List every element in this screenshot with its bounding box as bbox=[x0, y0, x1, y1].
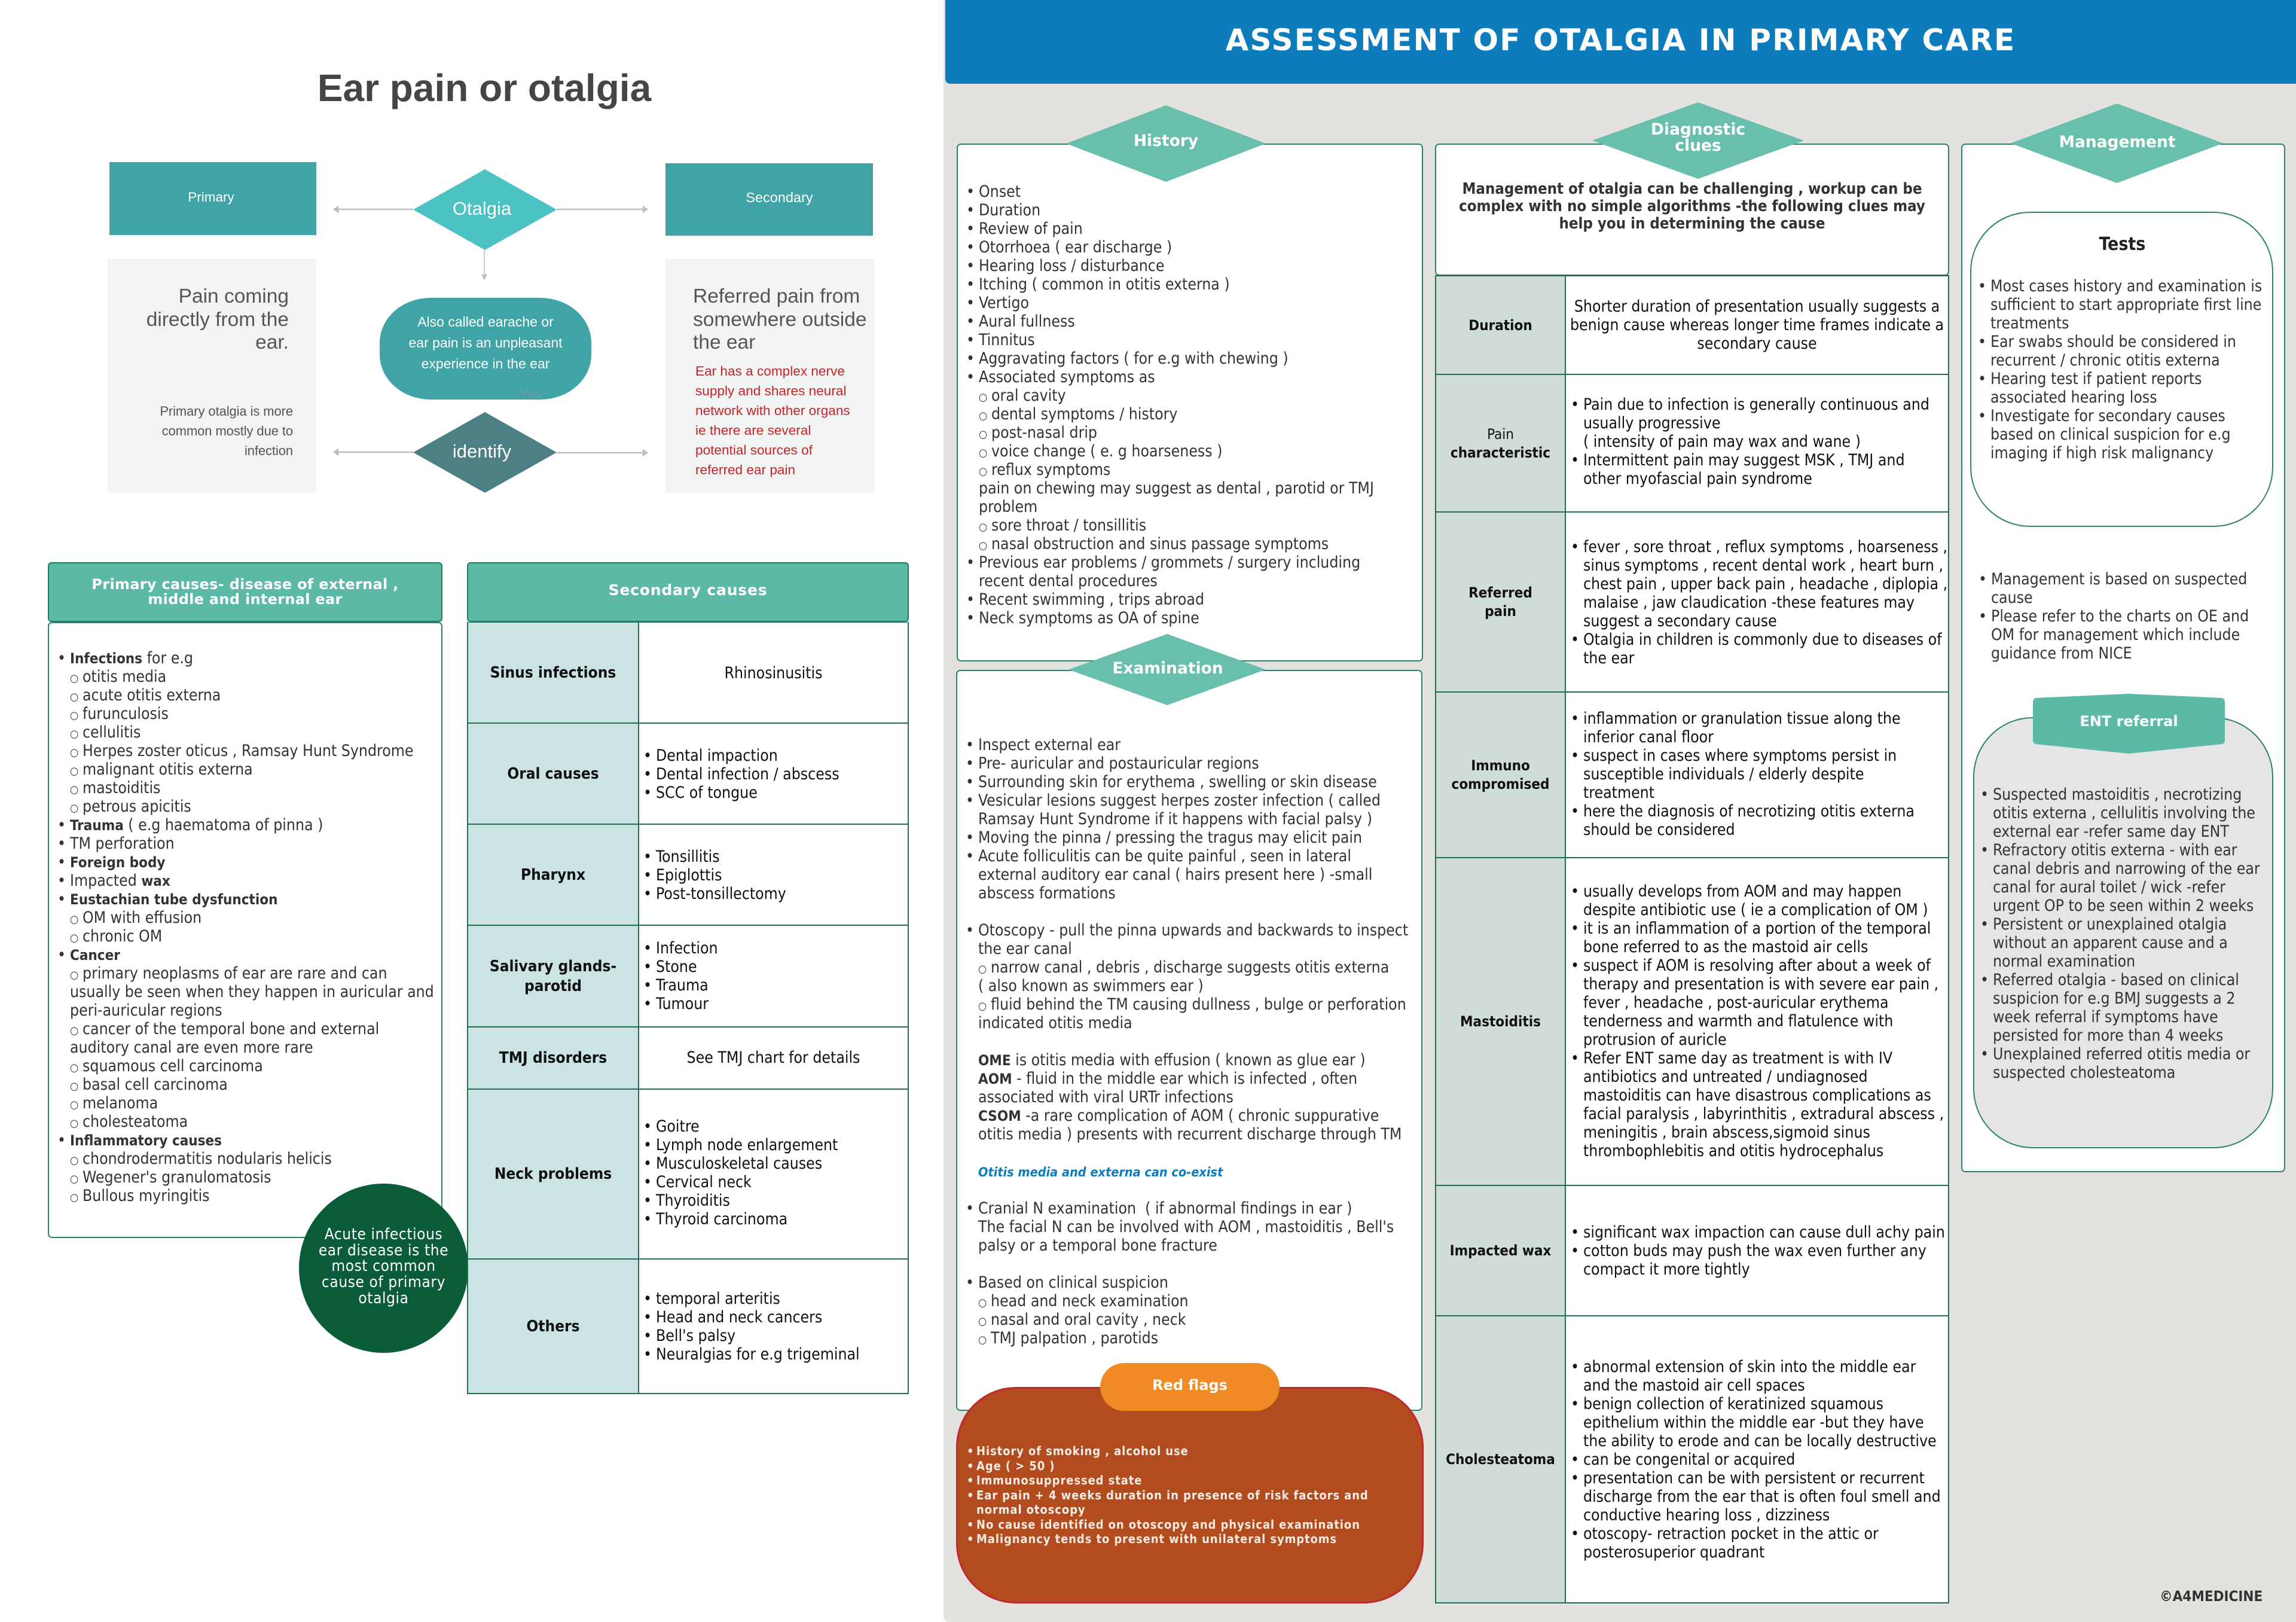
header: secondary causes bbox=[467, 562, 909, 622]
row: Salivary glands-parotid bbox=[468, 926, 908, 1028]
list: primary causes: ○ bbox=[70, 1062, 78, 1074]
row: Pain characteristic: Pain due to infection is generally continuous and usually progressive ( intensity of pain may wax and wane ) Intermittent pain may suggest MSK , TMJ and other myofascial pain syndrome bbox=[1583, 395, 1929, 488]
row: Cholesteatoma bbox=[1436, 1316, 1941, 1602]
text: pain coming directly from the ear: Pain coming directly from the ear. bbox=[146, 285, 289, 353]
panel: diagnostic clues intro bbox=[1435, 144, 1949, 276]
box: Secondary: Secondary bbox=[746, 190, 813, 205]
row: Impacted wax: Impacted wax bbox=[1450, 1242, 1551, 1259]
box: ENT referral bbox=[1973, 717, 2273, 1148]
row: Referred pain: • bbox=[1571, 538, 1579, 556]
box: ENT referral: • bbox=[1980, 785, 1989, 804]
row: Salivary glands-parotid: • bbox=[643, 995, 652, 1013]
list: primary causes: Infections for e.g otitis media acute otitis externa furunculosis cellulitis Herpes zoster oticus , Ramsay Hunt Syndrome malignant otitis externa mastoiditis petrous apicitis Trauma ( e.g haematoma of pinna ) TM perforation Foreign body Impacted wax Eustachian tube dysfunction OM with effusion chronic OM Cancer primary neoplasms of ear are rare and can usually be seen when they happen in auricular and peri-auricular regions cancer of the temporal bone and external auditory canal are even more rare squamous cell carcinoma basal cell carcinoma melanoma cholesteatoma Inflammatory causes chondrodermatitis nodularis helicis Wegener's granulomatosis Bullous myringitis bbox=[70, 649, 434, 1205]
list: primary causes: ○ bbox=[70, 1154, 78, 1167]
row: Pain characteristic bbox=[1436, 375, 1948, 513]
panel: history: • bbox=[966, 294, 975, 312]
list: primary causes: ○ bbox=[70, 691, 78, 703]
row: Immuno compromised: • bbox=[1571, 802, 1579, 821]
heading: Tests: Tests bbox=[2099, 234, 2145, 255]
row: Immuno compromised: • bbox=[1571, 746, 1579, 765]
row: Pain characteristic: Pain characteristic bbox=[1451, 426, 1550, 461]
row: Others: temporal arteritis Head and neck cancers Bell's palsy Neuralgias for e.g trigeminal bbox=[656, 1289, 860, 1364]
row: Impacted wax: • bbox=[1571, 1223, 1579, 1242]
box: tests: • bbox=[1978, 333, 1986, 351]
arrows: flow connectors bbox=[333, 206, 648, 457]
panel: history: • bbox=[966, 257, 975, 275]
row: Neck problems: • bbox=[643, 1154, 652, 1173]
list: red flags: History of smoking , alcohol use Age ( > 50 ) Immunosuppressed state Ear pain + 4 weeks duration in presence of risk factors and normal otoscopy No cause identified on otoscopy and physical examination Malignancy tends to present with unilateral symptoms bbox=[976, 1444, 1369, 1546]
panel: history: • bbox=[966, 553, 975, 572]
list: primary causes: ○ bbox=[70, 802, 78, 815]
row: Salivary glands-parotid: • bbox=[643, 939, 652, 958]
text: primary otalgia is more common: Primary otalgia is more common mostly due to infection bbox=[160, 404, 293, 458]
row: Cholesteatoma: • bbox=[1571, 1469, 1579, 1487]
list: examination: ○ bbox=[978, 1315, 987, 1328]
row: Impacted wax: significant wax impaction can cause dull achy pain cotton buds may push the wax even further any compact it more tightly bbox=[1583, 1223, 1945, 1279]
list: primary causes: ○ bbox=[70, 1191, 78, 1204]
box: Primary: Primary bbox=[188, 190, 234, 205]
panel: red flags: • bbox=[967, 1458, 974, 1472]
panel: primary causes list: • bbox=[57, 816, 66, 834]
panel: examination: • bbox=[966, 754, 974, 773]
pill heading: Red flags: Red flags bbox=[1152, 1377, 1228, 1394]
panel: red flags: • bbox=[967, 1444, 974, 1458]
panel: primary causes list bbox=[48, 622, 442, 1238]
row: Oral causes: • bbox=[643, 765, 652, 783]
box: ENT referral: • bbox=[1980, 1045, 1989, 1063]
panel: red flags: • bbox=[967, 1488, 974, 1502]
panel: examination: • bbox=[966, 773, 974, 791]
panel: primary causes list: • bbox=[57, 649, 66, 667]
list: primary causes: ○ bbox=[70, 765, 78, 778]
row: Neck problems: • bbox=[643, 1191, 652, 1210]
panel: history: • bbox=[966, 590, 975, 609]
row: Pharynx: • bbox=[643, 847, 652, 866]
title: Ear pain or otalgia: Ear pain or otalgia bbox=[317, 66, 651, 109]
row: Cholesteatoma: • bbox=[1571, 1525, 1579, 1543]
box: ENT referral: • bbox=[1980, 841, 1989, 859]
list: primary causes: ○ bbox=[70, 913, 78, 926]
diamond: identify: identify bbox=[453, 441, 511, 462]
list: history: ○ bbox=[979, 428, 987, 441]
diamond heading: History bbox=[1066, 105, 1266, 182]
box: tests: • bbox=[1978, 277, 1986, 295]
list: history: ○ bbox=[979, 410, 987, 422]
box: ENT referral: • bbox=[1980, 915, 1989, 934]
panel: examination: • bbox=[966, 921, 974, 940]
row: Mastoiditis: • bbox=[1571, 882, 1579, 901]
credit: ©A4MEDICINE bbox=[2160, 1588, 2263, 1605]
panel: history: • bbox=[966, 275, 975, 294]
row: Oral causes: • bbox=[643, 783, 652, 802]
row: Others: Others bbox=[526, 1317, 580, 1335]
list: examination: Inspect external ear Pre- auricular and postauricular regions Surrounding skin for erythema , swelling or skin disease Vesicular lesions suggest herpes zoster infection ( called Ramsay Hunt Syndrome if it happens with facial palsy ) Moving the pinna / pressing the tragus may elicit pain Acute folliculitis can be quite painful , seen in lateral external auditory ear canal ( hairs present here ) -small abscess formations Otoscopy - pull the pinna upwards and backwards to inspect the ear canal narrow canal , debris , discharge suggests otitis externa ( also known as swimmers ear ) fluid behind the TM causing dullness , bulge or perforation indicated otitis media OME is otitis media with effusion ( known as glue ear ) AOM - fluid in the middle ear which is infected , often associated with viral URTr infections CSOM -a rare complication of AOM ( chronic suppurative otitis media ) presents with recurrent discharge through TM Otitis media and externa can co-exist Cranial N examination ( if abnormal findings in ear ) The facial N can be involved with AOM , mastoiditis , Bell's palsy or a temporal bone fracture Based on clinical suspicion head and neck examination nasal and oral cavity , neck TMJ palpation , parotids bbox=[978, 736, 1408, 1347]
list: history: ○ bbox=[979, 447, 987, 459]
text: definition lines: Also called earache or ear pain is an unpleasant experience in the ear bbox=[408, 314, 563, 371]
row: Neck problems: • bbox=[643, 1136, 652, 1154]
panel: secondary description bbox=[665, 259, 874, 493]
panel: history: • bbox=[966, 331, 975, 349]
row: Pharynx: • bbox=[643, 885, 652, 903]
row: Cholesteatoma: • bbox=[1571, 1450, 1579, 1469]
panel: history: • bbox=[966, 368, 975, 386]
callout text: Acute infectious ear disease is the most common cause of primary otalgia bbox=[319, 1225, 448, 1307]
heading text: Primary causes- disease of external , middle and internal ear bbox=[91, 576, 399, 608]
row: Mastoiditis: • bbox=[1571, 1049, 1579, 1068]
row: Cholesteatoma: Cholesteatoma bbox=[1446, 1451, 1555, 1468]
row: Immuno compromised: Immuno compromised bbox=[1452, 757, 1549, 792]
list: examination: ○ bbox=[978, 1297, 987, 1309]
label: Examination: Examination bbox=[1112, 659, 1223, 678]
panel: history: • bbox=[966, 609, 975, 627]
text: ear has a complex nerve supply: Ear has a complex nerve supply and shares neural network with other organs ie there are several potential sources of referred ear pain bbox=[695, 364, 850, 477]
list: primary causes: ○ bbox=[70, 728, 78, 740]
panel: red flags: • bbox=[967, 1532, 974, 1546]
text: referred pain from somewhere outside the ear: Referred pain from somewhere outside the ear bbox=[693, 285, 867, 353]
row: Immuno compromised: • bbox=[1571, 709, 1579, 728]
panel: primary causes list: • bbox=[57, 890, 66, 908]
panel: history: • bbox=[966, 349, 975, 368]
panel: primary description bbox=[108, 259, 316, 493]
list: history: ○ bbox=[979, 391, 987, 404]
row: Pain characteristic: • bbox=[1571, 395, 1579, 414]
row: Oral causes: Dental impaction Dental infection / abscess SCC of tongue bbox=[656, 746, 839, 802]
panel: management: • bbox=[1979, 570, 1987, 589]
list: primary causes: ○ bbox=[70, 1117, 78, 1130]
list: primary causes: ○ bbox=[70, 1025, 78, 1037]
row: Mastoiditis bbox=[1436, 858, 1948, 1186]
list: management guidance: Management is based on suspected cause Please refer to the charts on OE and OM for management which include guidance from NICE bbox=[1991, 570, 2249, 663]
panel: red flags: • bbox=[967, 1473, 974, 1487]
row: Neck problems: • bbox=[643, 1173, 652, 1191]
diamond heading: Examination bbox=[1068, 634, 1266, 705]
panel: examination: • bbox=[966, 736, 974, 754]
row: Referred pain: • bbox=[1571, 630, 1579, 649]
label: History: History bbox=[1134, 132, 1198, 150]
list: history: ○ bbox=[979, 465, 987, 478]
header: primary causes bbox=[48, 562, 442, 622]
row: Others: • bbox=[643, 1308, 652, 1327]
list: primary causes: ○ bbox=[70, 672, 78, 685]
row: Pharynx: Tonsillitis Epiglottis Post-tonsillectomy bbox=[656, 847, 786, 903]
box: tests: • bbox=[1978, 407, 1986, 425]
row: Oral causes: Oral causes bbox=[507, 764, 599, 782]
panel: red flags: • bbox=[967, 1517, 974, 1531]
row: Duration bbox=[1436, 276, 1948, 375]
panel: history bbox=[957, 144, 1423, 661]
row: Impacted wax: • bbox=[1571, 1242, 1579, 1260]
row: Cholesteatoma: • bbox=[1571, 1358, 1579, 1376]
panel: primary causes list: • bbox=[57, 871, 66, 890]
list: history: ○ bbox=[979, 521, 987, 533]
list: primary causes: ○ bbox=[70, 1099, 78, 1111]
text: management of otalgia can be challenging: Management of otalgia can be challenging , workup can be complex with no simple algorithms -the following clues may help you in determining the cause bbox=[1459, 180, 1925, 233]
row: Oral causes: • bbox=[643, 746, 652, 765]
row: Mastoiditis: • bbox=[1571, 956, 1579, 975]
label: Management: Management bbox=[2059, 133, 2176, 151]
row: Salivary glands-parotid: Salivary glands- parotid bbox=[490, 957, 616, 995]
list: primary causes: ○ bbox=[70, 1080, 78, 1093]
panel: examination: • bbox=[966, 791, 974, 810]
list: history: ○ bbox=[979, 539, 987, 552]
panel: management bbox=[1961, 144, 2285, 1172]
row: Pharynx: • bbox=[643, 866, 652, 885]
box: Secondary bbox=[665, 163, 873, 236]
row: Salivary glands-parotid: • bbox=[643, 976, 652, 995]
row: Neck problems: • bbox=[643, 1210, 652, 1228]
row: Oral causes bbox=[468, 724, 908, 825]
row: Referred pain: Referred pain bbox=[1468, 584, 1532, 620]
list: primary causes: ○ bbox=[70, 746, 78, 759]
row: Others: • bbox=[643, 1289, 652, 1308]
banner: ENT referral bbox=[2033, 694, 2225, 754]
row: Referred pain: fever , sore throat , reflux symptoms , hoarseness , sinus symptoms , recent dental work , heart burn , chest pain , upper back pain , headache , diplopia , malaise , jaw claudication -these features may suggest a secondary cause Otalgia in children is commonly due to diseases of the ear bbox=[1583, 538, 1947, 667]
row: Duration: Duration bbox=[1468, 317, 1532, 334]
panel: primary causes list: • bbox=[57, 853, 66, 871]
list: primary causes: ○ bbox=[70, 1173, 78, 1185]
panel: history: • bbox=[966, 312, 975, 331]
panel: history: • bbox=[966, 238, 975, 257]
row: Sinus infections: Rhinosinusitis bbox=[724, 664, 823, 682]
list: examination: ○ bbox=[978, 1000, 987, 1013]
panel: red flags bbox=[956, 1387, 1424, 1603]
panel: examination: • bbox=[966, 828, 974, 847]
panel: history: • bbox=[966, 201, 975, 219]
panel: examination: • bbox=[966, 1273, 974, 1292]
row: Neck problems: • bbox=[643, 1117, 652, 1136]
row: TMJ disorders: TMJ disorders bbox=[499, 1049, 607, 1067]
panel: examination: • bbox=[966, 1199, 974, 1218]
row: Immuno compromised: inflammation or granulation tissue along the inferior canal floor suspect in cases where symptoms persist in susceptible individuals / elderly despite treatment here the diagnosis of necrotizing otitis externa should be considered bbox=[1583, 709, 1915, 839]
box: ENT referral: • bbox=[1980, 971, 1989, 989]
diamond heading: Management bbox=[2011, 103, 2223, 183]
row: Cholesteatoma: abnormal extension of skin into the middle ear and the mastoid air cell spaces benign collection of keratinized squamous epithelium within the middle ear -but they have the ability to erode and can be locally destructive can be congenital or acquired presentation can be with persistent or recurrent discharge from the ear that is often foul smell and conductive hearing loss , dizziness otoscopy- retraction pocket in the attic or posterosuperior quadrant bbox=[1583, 1358, 1941, 1562]
table: diagnostic clues bbox=[1435, 275, 1949, 1603]
row: Sinus infections bbox=[468, 623, 908, 724]
row: Pain characteristic: • bbox=[1571, 451, 1579, 469]
row: Impacted wax bbox=[1436, 1186, 1948, 1316]
row: Others: • bbox=[643, 1345, 652, 1364]
panel: primary causes list: • bbox=[57, 946, 66, 964]
banner: ENT referral: ENT referral bbox=[2080, 713, 2178, 730]
diamond heading: Diagnostic clues bbox=[1592, 102, 1804, 179]
text: faint Yes: Yes bbox=[520, 386, 542, 401]
diamond: Otalgia bbox=[413, 169, 557, 250]
panel: primary causes list: • bbox=[57, 834, 66, 853]
list: tests: Most cases history and examination is sufficient to start appropriate first line treatments Ear swabs should be considered in recurrent / chronic otitis externa Hearing test if patient reports associated hearing loss Investigate for secondary causes based on clinical suspicion for e.g imaging if high risk malignancy bbox=[1990, 277, 2262, 462]
panel: management: • bbox=[1979, 607, 1987, 626]
panel: examination: • bbox=[966, 847, 974, 865]
row: Duration: Shorter duration of presentation usually suggests a benign cause whereas longer time frames indicate a secondary cause bbox=[1570, 297, 1944, 353]
list: primary causes: ○ bbox=[70, 783, 78, 796]
box: tests: • bbox=[1978, 370, 1986, 388]
pill heading: Red flags bbox=[1100, 1363, 1280, 1411]
header: secondary causes: Secondary causes bbox=[609, 581, 767, 599]
banner: assessment title: ASSESSMENT OF OTALGIA IN PRIMARY CARE bbox=[1226, 23, 2016, 57]
banner: assessment title bbox=[945, 0, 2296, 84]
list: primary causes: ○ bbox=[70, 932, 78, 944]
row: TMJ disorders: See TMJ chart for details bbox=[687, 1048, 860, 1067]
list: primary causes: ○ bbox=[70, 969, 78, 981]
row: Referred pain bbox=[1436, 513, 1948, 693]
row: Salivary glands-parotid: Infection Stone Trauma Tumour bbox=[656, 939, 718, 1013]
row: Neck problems: Goitre Lymph node enlargement Musculoskeletal causes Cervical neck Thyroiditis Thyroid carcinoma bbox=[656, 1117, 838, 1228]
row: Salivary glands-parotid: • bbox=[643, 958, 652, 976]
diamond: Otalgia: Otalgia bbox=[453, 198, 511, 219]
diamond: identify bbox=[413, 412, 557, 493]
row: Others bbox=[468, 1260, 860, 1393]
list: examination: ○ bbox=[978, 963, 987, 975]
row: Cholesteatoma: • bbox=[1571, 1395, 1579, 1413]
box: Primary bbox=[109, 162, 316, 235]
panel: history: • bbox=[966, 219, 975, 238]
row: Others: • bbox=[643, 1327, 652, 1345]
label: Diagnostic clues: Diagnostic clues bbox=[1651, 120, 1745, 155]
panel: history: • bbox=[966, 182, 975, 201]
row: Neck problems bbox=[468, 1090, 908, 1260]
row: Immuno compromised bbox=[1436, 693, 1948, 858]
list: primary causes: ○ bbox=[70, 709, 78, 722]
background: right section bbox=[944, 0, 2296, 1622]
row: Mastoiditis: usually develops from AOM and may happen despite antibiotic use ( ie a complication of OM ) it is an inflammation of a portion of the temporal bone referred to as the mastoid air cells suspect if AOM is resolving after about a week of therapy and presentation is with severe ear pain , fever , headache , post-auricular erythema tenderness and warmth and flatulence with protrusion of auricle Refer ENT same day as treatment is with IV antibiotics and untreated / undiagnosed mastoiditis can have disastrous complications as facial paralysis , labyrinthitis , extradural abscess , meningitis , brain abscess,sigmoid sinus thrombophlebitis and otitis hydrocephalus bbox=[1583, 882, 1944, 1160]
row: Mastoiditis: • bbox=[1571, 919, 1579, 938]
table: secondary causes bbox=[467, 622, 909, 1394]
row: TMJ disorders bbox=[468, 1028, 908, 1090]
callout: acute infectious ear disease bbox=[299, 1184, 468, 1353]
row: Pharynx: Pharynx bbox=[521, 866, 585, 884]
list: history: Onset Duration Review of pain Otorrhoea ( ear discharge ) Hearing loss / disturbance Itching ( common in otitis externa ) Vertigo Aural fullness Tinnitus Aggravating factors ( for e.g with chewing ) Associated symptoms as oral cavity dental symptoms / history post-nasal drip voice change ( e. g hoarseness ) reflux symptoms pain on chewing may suggest as dental , parotid or TMJ problem sore throat / tonsillitis nasal obstruction and sinus passage symptoms Previous ear problems / grommets / surgery including recent dental procedures Recent swimming , trips abroad Neck symptoms as OA of spine bbox=[979, 182, 1374, 627]
panel: examination bbox=[956, 670, 1422, 1411]
definition: also called earache bbox=[380, 298, 591, 400]
panel: primary causes list: • bbox=[57, 1131, 66, 1150]
list: examination: ○ bbox=[978, 1334, 987, 1346]
row: Sinus infections: Sinus infections bbox=[490, 664, 616, 682]
row: Neck problems: Neck problems bbox=[494, 1165, 612, 1183]
list: ENT referral: Suspected mastoiditis , necrotizing otitis externa , cellulitis involving the external ear -refer same day ENT Refractory otitis externa - with ear canal debris and narrowing of the ear canal for aural toilet / wick -refer urgent OP to be seen within 2 weeks Persistent or unexplained otalgia without an apparent cause and a normal examination Referred otalgia - based on clinical suspicion for e.g BMJ suggests a 2 week referral if symptoms have persisted for more than 4 weeks Unexplained referred otitis media or suspected cholesteatoma bbox=[1993, 785, 2260, 1082]
row: Mastoiditis: Mastoiditis bbox=[1460, 1013, 1541, 1030]
box: tests bbox=[1970, 212, 2273, 527]
row: Pharynx bbox=[468, 825, 908, 926]
